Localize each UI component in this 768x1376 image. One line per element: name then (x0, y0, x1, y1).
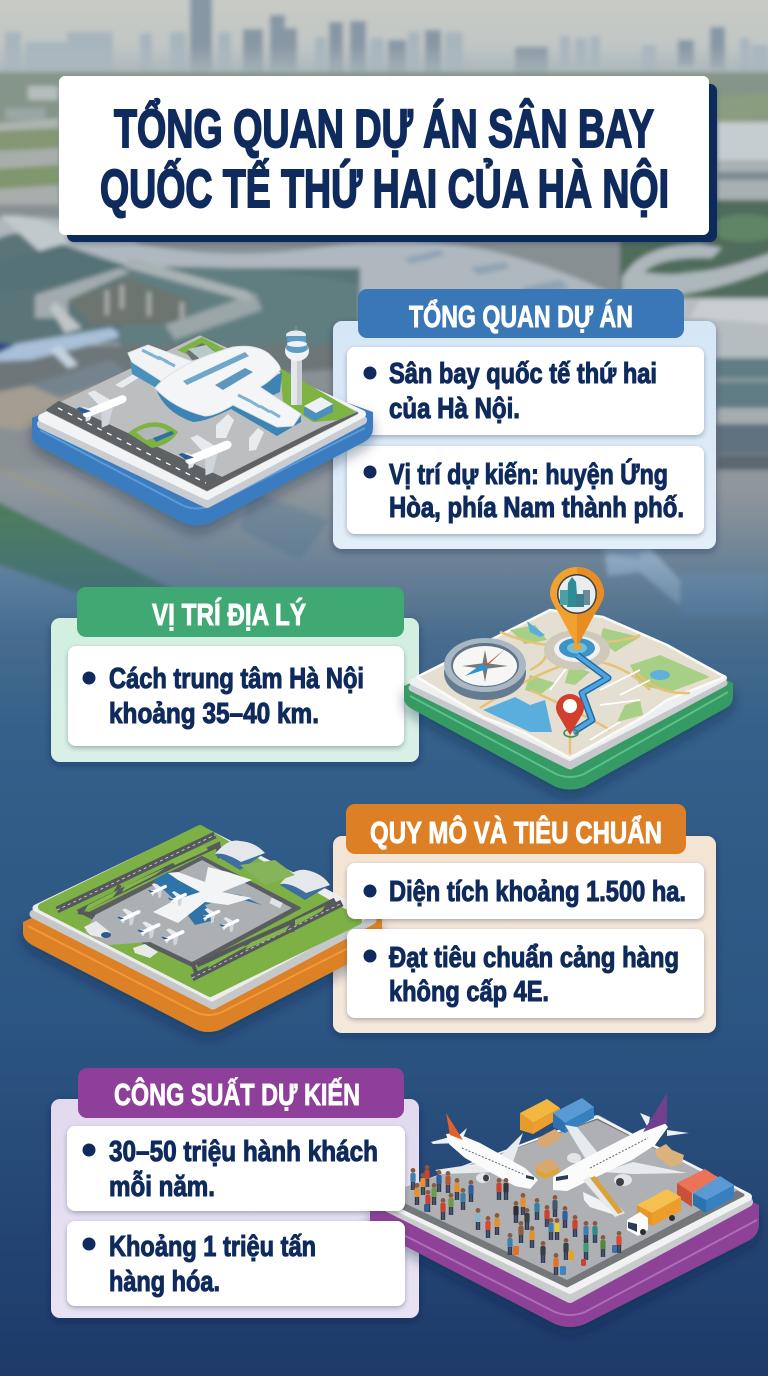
control tower (285, 326, 309, 405)
heading: Quy mô và tiêu chuẩn: QUY MÔ VÀ TIÊU CHUẨN (370, 814, 662, 850)
map sheet (417, 610, 725, 758)
heading: Công suất dự kiến: CÔNG SUẤT DỰ KIẾN (114, 1076, 360, 1112)
panel: Tổng quan dự án: Hòa, phía Nam thành phố. (389, 492, 684, 524)
icon: passengers, planes and cargo on purple base (370, 1093, 759, 1327)
service buildings (84, 898, 283, 958)
title box with navy offset shadow (59, 76, 717, 242)
list: Quy mô và tiêu chuẩn: Đạt tiêu chuẩn cảng hàng (389, 942, 679, 974)
heading: Vị trí địa lý: VỊ TRÍ ĐỊA LÝ (152, 597, 306, 632)
route (573, 655, 608, 732)
taxiway loop and apron (85, 857, 300, 966)
terminal building (128, 345, 301, 436)
panel: Vị trí địa lý (51, 618, 419, 762)
panel: Vị trí địa lý: Cách trung tâm Hà Nội (109, 663, 364, 695)
heading: Quy mô và tiêu chuẩn (346, 804, 686, 854)
heading: Công suất dự kiến (78, 1068, 404, 1118)
title text (100, 98, 669, 219)
containers (520, 1098, 734, 1213)
panel: Tổng quan dự án (333, 321, 716, 549)
panel: Tổng quan dự án: Sân bay quốc tế thứ hai (389, 358, 657, 390)
list: Công suất dự kiến: Khoảng 1 triệu tấn (109, 1231, 316, 1263)
passengers crowd (410, 1165, 622, 1275)
parked planes (115, 879, 242, 949)
panel: Tổng quan dự án: Vị trí dự kiến: huyện Ứng (389, 457, 668, 491)
list: Quy mô và tiêu chuẩn (347, 863, 704, 1018)
list: Công suất dự kiến: 30–50 triệu hành khách (109, 1136, 378, 1168)
list: Quy mô và tiêu chuẩn: Diện tích khoảng 1.500 ha. (389, 876, 686, 908)
icon: isometric airport terminal on blue base (32, 326, 373, 526)
map pin: city destination (550, 567, 604, 650)
panel: Vị trí địa lý: khoảng 35–40 km. (109, 698, 319, 730)
parking island (128, 422, 178, 448)
icon: map with compass, pins and route on green base (404, 567, 733, 790)
panel: Quy mô và tiêu chuẩn (333, 836, 716, 1033)
heading: Tổng quan dự án (358, 289, 684, 338)
plane (174, 424, 239, 482)
heading: Tổng quan dự án: TỔNG QUAN DỰ ÁN (409, 298, 633, 334)
plane: orange tail (431, 1113, 538, 1189)
cargo boxes (535, 1129, 684, 1179)
icon: isometric airport master plan on orange base (23, 829, 382, 1032)
list: Công suất dự kiến: hàng hóa. (109, 1266, 220, 1298)
compass (444, 638, 526, 700)
list: Quy mô và tiêu chuẩn: không cấp 4E. (389, 976, 549, 1008)
heading: Vị trí địa lý (77, 587, 404, 637)
small building (304, 397, 333, 421)
map pin: red origin (556, 694, 584, 737)
runways (57, 835, 342, 978)
hangars (215, 841, 330, 900)
terminal (153, 867, 262, 925)
jet bridges (115, 373, 264, 451)
panel: Công suất dự kiến (51, 1099, 419, 1318)
green islands (84, 845, 325, 968)
boarding stairs (583, 1176, 625, 1217)
panel: Tổng quan dự án: của Hà Nội. (389, 393, 520, 425)
cargo truck (627, 1189, 681, 1236)
list: Công suất dự kiến: mỗi năm. (109, 1169, 215, 1203)
plane: purple tail (553, 1093, 689, 1191)
list: Công suất dự kiến (67, 1126, 405, 1306)
roundabout (544, 630, 610, 670)
plane (73, 380, 133, 434)
